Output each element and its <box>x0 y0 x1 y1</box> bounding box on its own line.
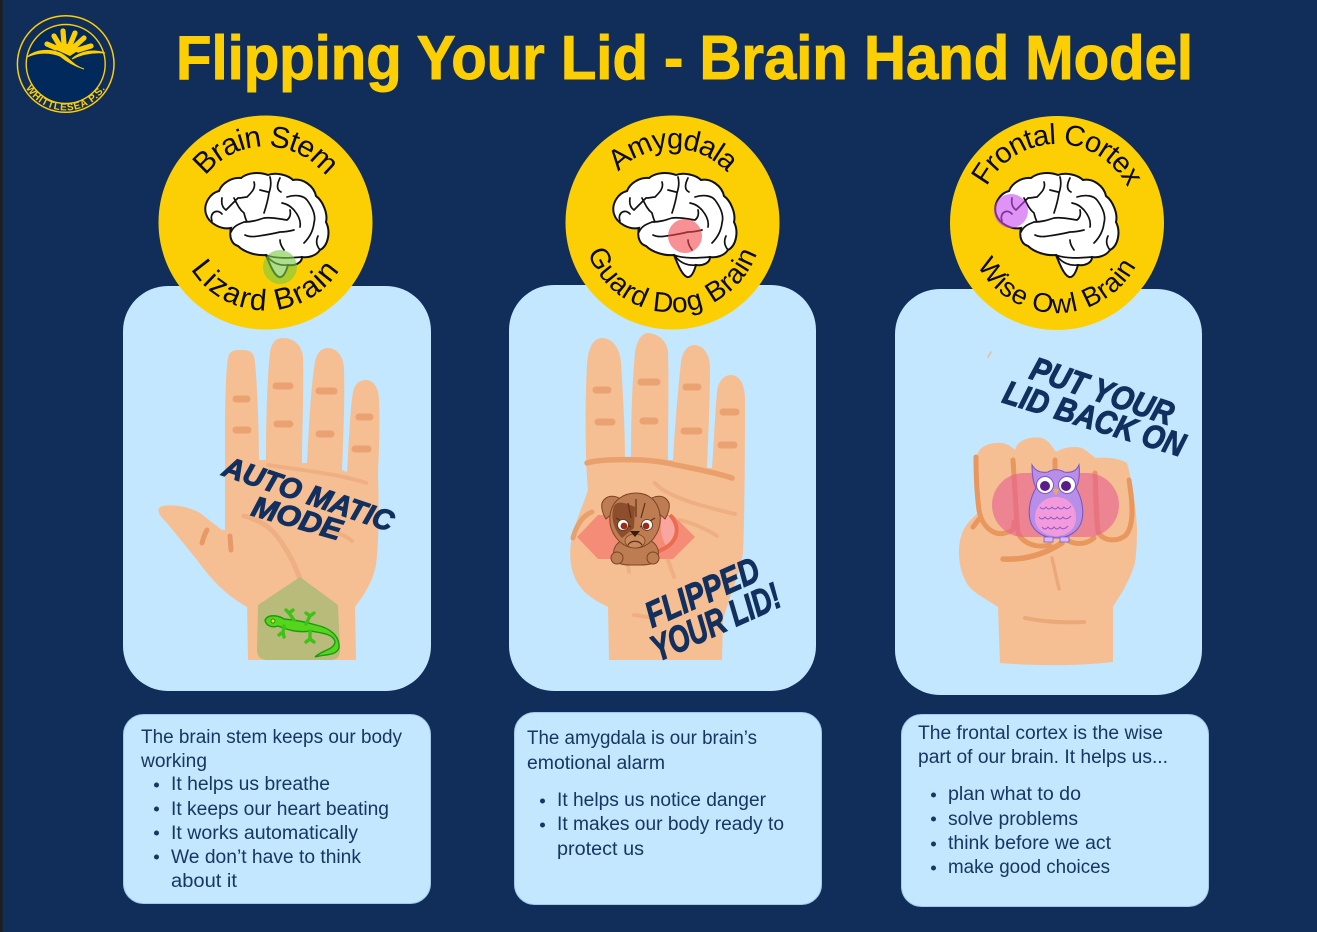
badge: frontal cortex <box>950 116 1164 330</box>
text card: frontal cortex: think before we act <box>948 833 1112 854</box>
text card: amygdala: It helps us notice danger <box>557 790 767 811</box>
panel: frontal cortex fist <box>895 116 1202 695</box>
amygdala region <box>577 515 695 559</box>
badge: brain stem: Brain Stem <box>192 126 335 175</box>
brush label: automatic mode: AUTO MATIC <box>218 451 399 539</box>
icon: wise owl <box>1029 465 1083 542</box>
text card: brain stem <box>124 714 430 904</box>
badge: brain stem: Lizard Brain <box>192 258 338 311</box>
text card: brain stem: working <box>140 751 207 772</box>
brain stem region <box>257 577 340 660</box>
text card: frontal cortex: part of our brain. It helps us... <box>918 747 1168 768</box>
brush label: flipped your lid: FLIPPED <box>639 549 766 635</box>
text card: frontal cortex: solve problems <box>948 809 1078 830</box>
palm creases <box>202 386 370 588</box>
text card: brain stem: about it <box>171 871 238 892</box>
text card: amygdala: It makes our body ready to <box>557 814 784 835</box>
badge: amygdala: Amygdala <box>612 131 734 172</box>
hand: open palm <box>158 338 379 660</box>
brush label: put your lid back on: PUT YOUR <box>1026 350 1179 432</box>
panel: brain stem hand <box>123 116 431 691</box>
school logo: WHITTLESEA P.S. <box>26 84 105 110</box>
text card: brain stem: It keeps our heart beating <box>171 799 389 820</box>
badge: frontal cortex: Frontal Cortex <box>971 123 1140 187</box>
text card: brain stem: We don’t have to think <box>171 847 362 868</box>
frontal cortex region <box>992 473 1119 537</box>
text card: amygdala: emotional alarm <box>527 753 665 774</box>
panel: amygdala hand <box>509 116 816 691</box>
brush label: automatic mode: MODE <box>248 491 347 548</box>
text card: brain stem: It helps us breathe <box>171 774 330 795</box>
brush label: flipped your lid: YOUR LID! <box>644 575 787 669</box>
brush label: put your lid back on <box>999 350 1191 464</box>
fist creases <box>973 457 1132 622</box>
text card: frontal cortex: The frontal cortex is the wise <box>918 723 1163 744</box>
icon: lizard <box>265 610 339 657</box>
title: Flipping Your Lid - Brain Hand Model <box>176 24 1193 93</box>
icon: guard dog <box>602 493 669 565</box>
text card: amygdala: The amygdala is our brain’s <box>527 728 757 749</box>
hand: closed fist <box>959 438 1137 665</box>
badge: amygdala: Guard Dog Brain <box>590 248 756 316</box>
school logo <box>16 15 115 113</box>
text card: brain stem: The brain stem keeps our body <box>141 727 402 748</box>
badge: frontal cortex: Wise Owl Brain <box>980 254 1136 314</box>
text card: amygdala <box>514 712 822 904</box>
text card: frontal cortex: make good choices <box>948 857 1110 878</box>
text card: amygdala: protect us <box>557 839 644 860</box>
text card: frontal cortex <box>902 714 1208 906</box>
hand: thumb folded <box>570 333 745 660</box>
text card: brain stem: It works automatically <box>171 823 359 844</box>
badge: brain stem <box>158 116 372 330</box>
badge: amygdala <box>566 116 780 330</box>
brush label: put your lid back on: LID BACK ON <box>999 373 1191 464</box>
palm creases <box>573 382 736 618</box>
text card: frontal cortex: plan what to do <box>948 784 1081 805</box>
